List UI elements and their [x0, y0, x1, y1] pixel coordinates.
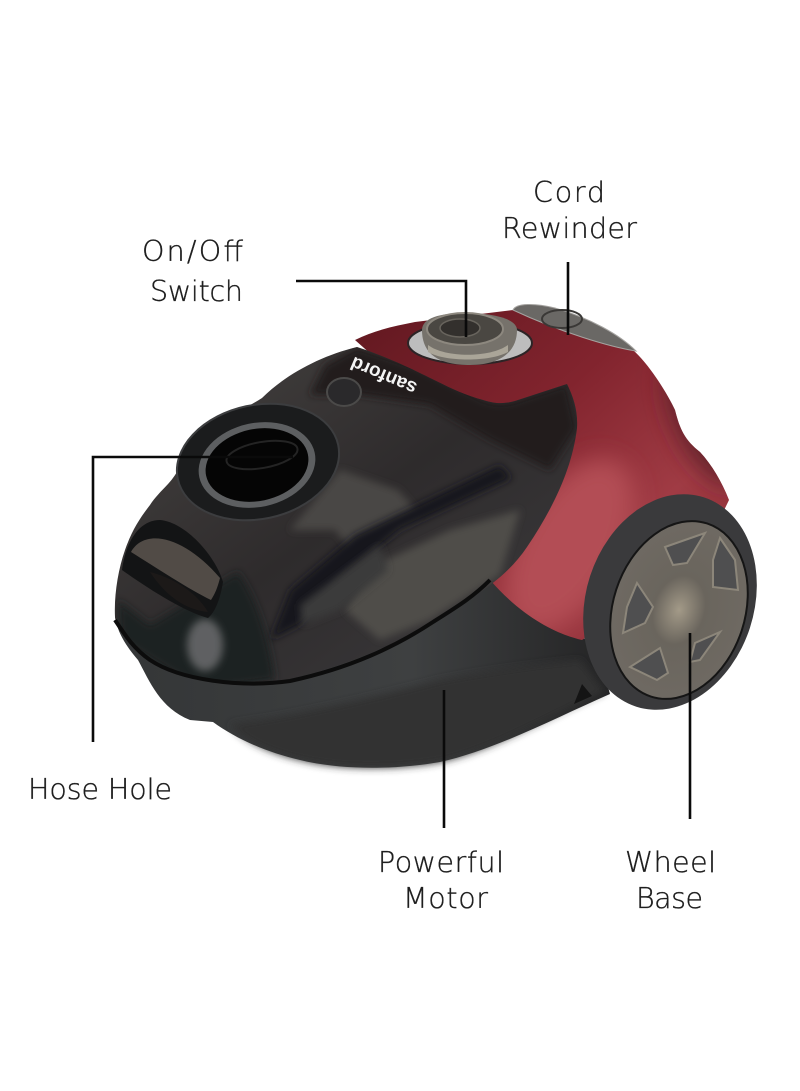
label: on/off switch: Switch	[150, 275, 243, 308]
label: on/off switch	[142, 235, 466, 337]
red dark side	[654, 376, 728, 496]
label: wheel base: Wheel	[625, 846, 716, 879]
white front reflection	[187, 619, 223, 671]
on/off switch dial	[408, 313, 532, 365]
base notch	[574, 684, 592, 704]
small canopy knob	[327, 378, 361, 406]
label: powerful motor: Powerful	[378, 846, 504, 879]
brand label: sanford	[348, 352, 420, 398]
label: powerful motor	[378, 690, 504, 915]
canopy	[115, 347, 577, 690]
wheel windows	[623, 533, 738, 680]
label: wheel base	[625, 633, 716, 915]
dark diagonal band	[270, 465, 512, 640]
base shading	[230, 660, 605, 768]
label: hose hole	[28, 457, 293, 806]
label: hose hole: Hose Hole	[28, 773, 172, 806]
label: on/off switch: On/Off	[142, 235, 243, 268]
dark rear window	[310, 347, 577, 470]
black base	[115, 578, 610, 768]
front curved panel	[118, 572, 275, 690]
red highlight	[498, 452, 638, 634]
label: cord rewinder	[502, 176, 637, 335]
label: cord rewinder: Rewinder	[502, 212, 637, 245]
grey reflections	[292, 470, 412, 542]
label: wheel base: Base	[636, 882, 703, 915]
label: powerful motor: Motor	[403, 882, 488, 915]
red body	[355, 310, 729, 640]
vacuum cleaner	[115, 304, 784, 768]
front handle	[122, 520, 223, 618]
label: cord rewinder: Cord	[533, 176, 605, 209]
wheel	[556, 471, 784, 733]
mesh filter	[300, 545, 388, 625]
infographic canvas	[31, 180, 757, 909]
cord rewinder button	[513, 304, 636, 351]
hose hole	[166, 389, 350, 535]
canopy seam	[115, 580, 490, 683]
